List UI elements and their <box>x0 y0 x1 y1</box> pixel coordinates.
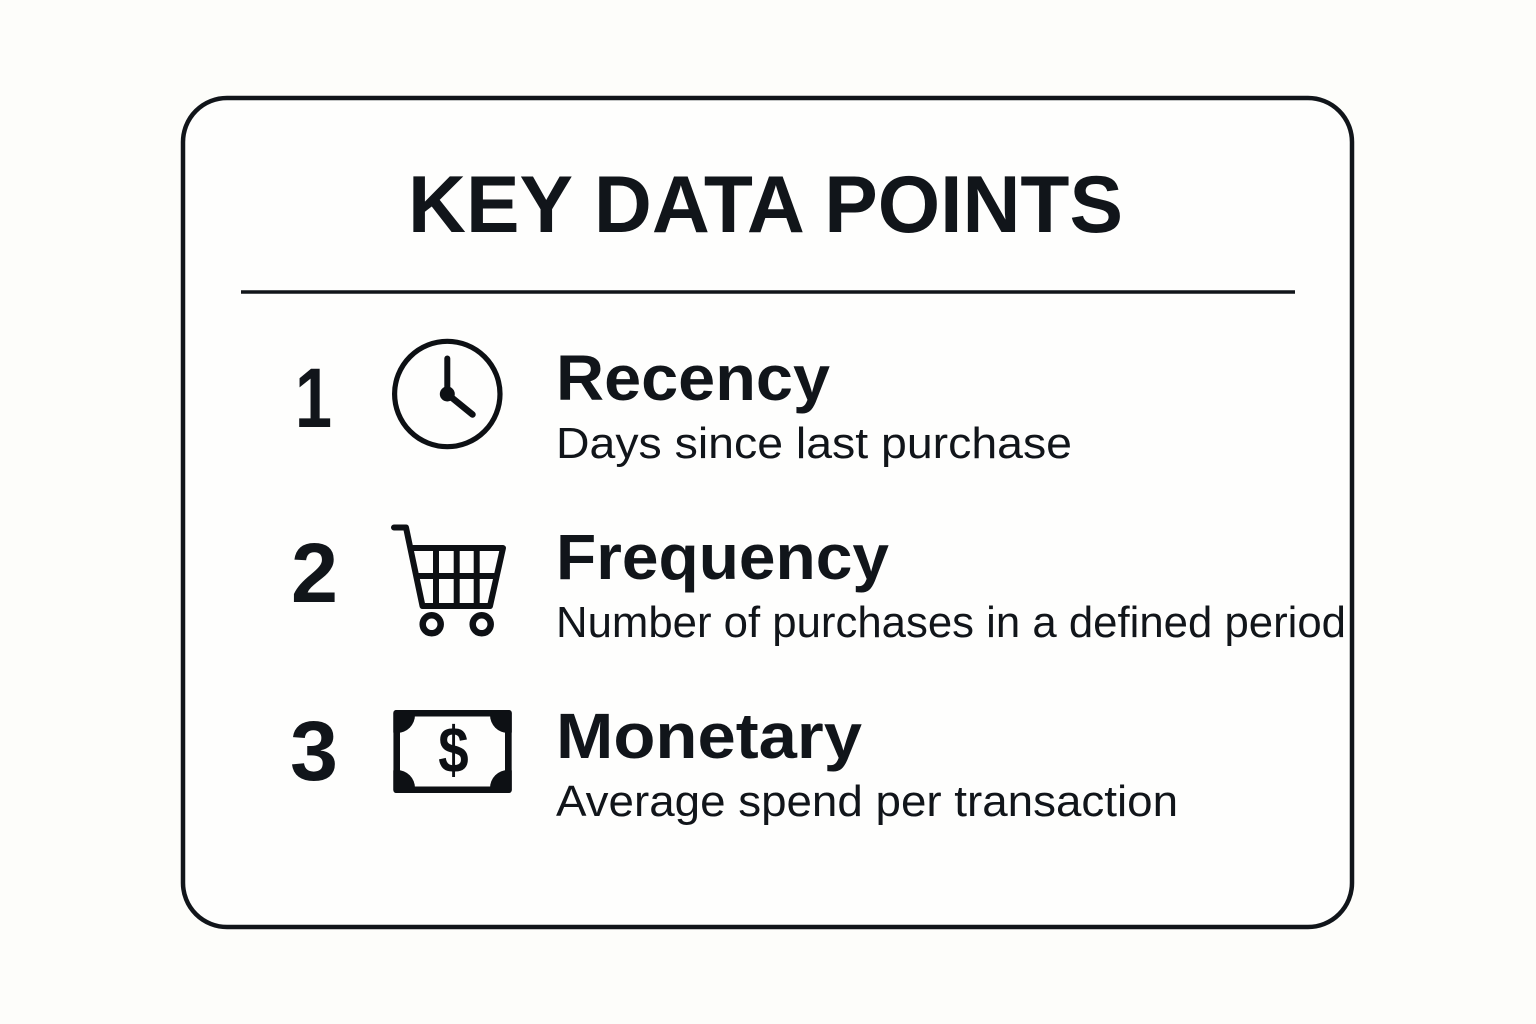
title: KEY DATA POINTS <box>408 160 1123 250</box>
heading: frequency: Frequency <box>556 521 889 593</box>
icon: clock <box>395 341 500 447</box>
row 3: monetary <box>292 710 1176 825</box>
icon: dollar bill: $ <box>438 713 469 786</box>
row 2: frequency <box>291 521 1346 647</box>
heading: recency: Recency <box>556 342 830 414</box>
description: frequency: Number of purchases in a defined period <box>556 598 1346 647</box>
row 1: recency <box>295 341 1072 468</box>
description: recency: Days since last purchase <box>556 419 1072 468</box>
heading: monetary: Monetary <box>556 700 862 772</box>
number 1: 1 <box>295 351 332 445</box>
number 3: 3 <box>290 704 338 798</box>
number 2: 2 <box>291 526 338 620</box>
panel: key data points card <box>183 98 1352 927</box>
description: monetary: Average spend per transaction <box>556 777 1178 826</box>
icon: shopping cart <box>394 528 503 633</box>
icon: dollar bill <box>393 710 512 793</box>
